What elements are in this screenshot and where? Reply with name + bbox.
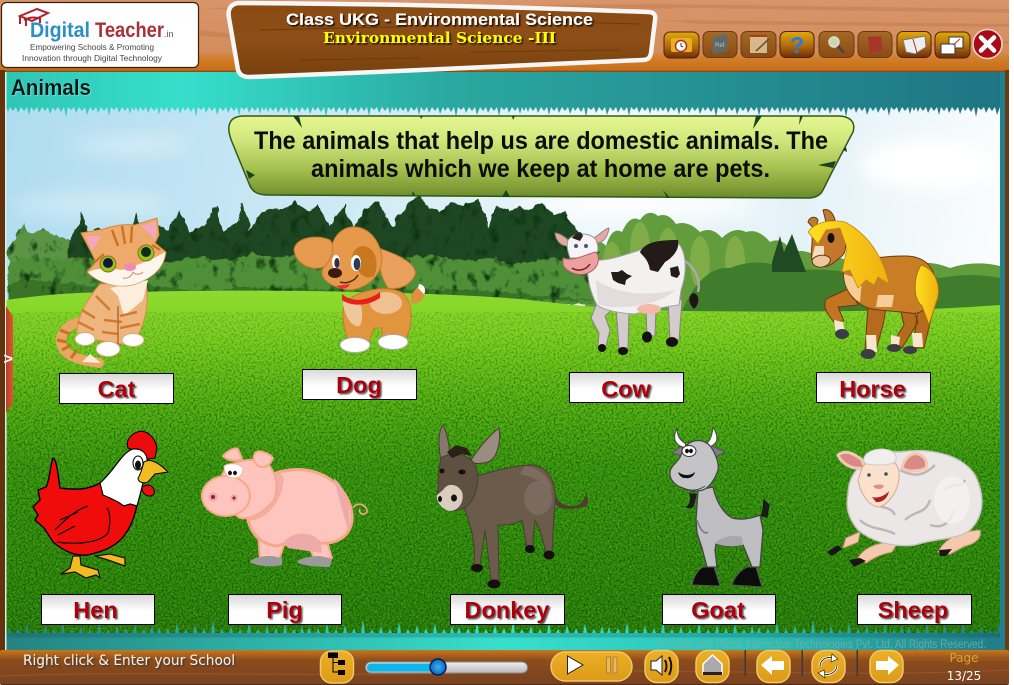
logo tagline xyxy=(22,42,163,63)
icon: home xyxy=(696,650,729,682)
banner: definition xyxy=(229,116,854,198)
animal: horse xyxy=(808,209,939,359)
title line 2: Environmental Science -III xyxy=(323,29,556,47)
title line 1: Class UKG - Environmental Science xyxy=(286,10,593,29)
icon: reference book xyxy=(703,32,737,58)
icon: close button xyxy=(973,30,1002,58)
logo wordmark: .in xyxy=(164,29,174,39)
teal header band xyxy=(6,72,1000,120)
sky xyxy=(6,106,1000,306)
separator xyxy=(802,650,803,676)
page background: top wood bar xyxy=(0,0,1009,72)
banner text line 1: The animals that help us are domestic animals. The xyxy=(254,127,828,155)
label: Sheep: Sheep xyxy=(878,597,948,623)
icon: folder clock xyxy=(664,32,699,58)
left side tab xyxy=(4,306,13,413)
audio progress slider xyxy=(366,659,528,675)
play and pause pill xyxy=(551,652,632,681)
icon: magnifier xyxy=(819,32,854,58)
icon: sound xyxy=(645,650,678,682)
icon: help xyxy=(780,32,814,58)
bottom bar xyxy=(0,650,1009,685)
icon: help: ? xyxy=(790,32,804,58)
label: Cow xyxy=(570,372,684,402)
icon: graduation cap xyxy=(20,9,48,26)
icon: forward arrow xyxy=(870,650,903,682)
icon: contents tree button xyxy=(320,651,354,683)
icon: abc book xyxy=(858,32,892,58)
logo panel xyxy=(2,2,198,68)
animal: cat xyxy=(57,218,166,363)
animal: cow xyxy=(555,228,699,355)
bottom teal strip xyxy=(6,620,1000,651)
title plaque xyxy=(229,3,655,77)
logo wordmark: Teacher xyxy=(95,19,164,42)
icon: back arrow xyxy=(757,650,790,682)
page counter: 13/25 xyxy=(947,669,981,683)
label: Pig xyxy=(228,594,342,624)
clouds xyxy=(10,135,1000,219)
icon: refresh xyxy=(812,650,845,682)
separator xyxy=(744,650,746,676)
label: Sheep xyxy=(858,594,972,624)
logo tagline: Empowering Schools & Promoting xyxy=(30,42,154,52)
label: Hen xyxy=(42,594,154,624)
page counter: Page xyxy=(949,651,979,665)
grass texture: dark blades xyxy=(6,312,1000,640)
label: Horse: Horse xyxy=(839,376,906,402)
separator xyxy=(856,650,858,676)
label: Dog xyxy=(302,370,416,400)
left side tab: > xyxy=(4,351,13,368)
page counter xyxy=(947,651,981,683)
animal: hen xyxy=(33,431,168,578)
icon: resize windows xyxy=(935,32,970,58)
label: Cat: Cat xyxy=(98,376,136,402)
forest: left tree line xyxy=(8,196,606,304)
logo tagline: Innovation through Digital Technology xyxy=(22,53,163,63)
grass texture: light blades xyxy=(6,312,1000,640)
animal: sheep xyxy=(827,449,982,567)
animal: donkey xyxy=(437,425,588,588)
label: Hen: Hen xyxy=(73,597,118,623)
label: Pig: Pig xyxy=(266,597,303,623)
label: Horse xyxy=(816,372,930,402)
label: Goat xyxy=(662,594,776,624)
logo wordmark xyxy=(30,19,174,42)
animal: dog xyxy=(294,227,425,352)
grass field xyxy=(6,291,1000,640)
banner text line 2: animals which we keep at home are pets. xyxy=(311,155,770,183)
school text: Right click & Enter your School xyxy=(23,653,235,669)
label: Cat xyxy=(60,374,174,404)
label: Donkey: Donkey xyxy=(465,597,549,623)
logo wordmark: Digital xyxy=(30,19,90,42)
icon: notepad xyxy=(741,32,776,58)
toolbar icons xyxy=(664,30,1002,58)
animal: pig xyxy=(202,448,367,567)
heading: Animals: Animals xyxy=(11,75,91,100)
forest: right tree line xyxy=(585,213,1000,316)
animal: goat xyxy=(670,427,769,587)
icon: reference book: Ref xyxy=(715,43,725,49)
label: Cow: Cow xyxy=(601,376,652,402)
label: Donkey xyxy=(450,594,564,624)
label: Goat: Goat xyxy=(691,597,745,623)
icon: open book xyxy=(897,32,931,58)
label: Dog: Dog xyxy=(336,372,382,398)
